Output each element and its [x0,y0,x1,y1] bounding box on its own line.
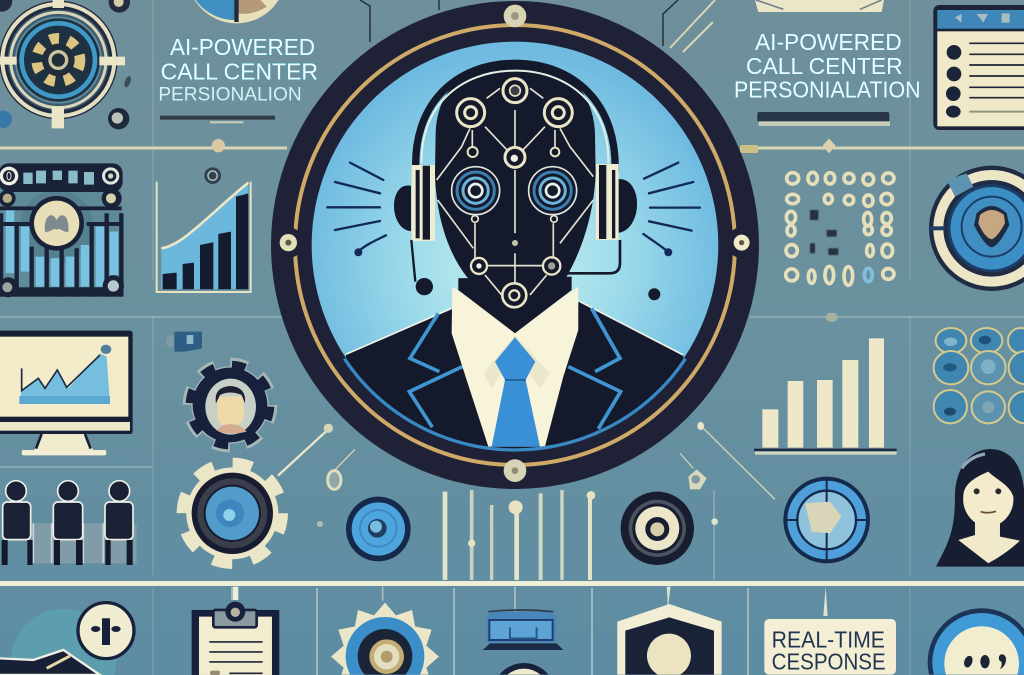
chart: cream bars [754,338,897,455]
vertical stub [823,587,828,616]
main portrait medallion [271,1,759,489]
connector lines [680,422,775,580]
icon: blue compass badge [783,477,870,563]
lower-left region [0,331,355,675]
icon: monitor with chart [0,331,133,455]
label: real-time response: CESPONSE [772,649,886,675]
icon: blue audio button [346,497,411,561]
knob right [826,313,838,322]
title underline right [757,112,890,126]
icon: form window [933,5,1024,130]
left eye [452,167,500,215]
title left: AI-POWERED [170,34,315,60]
lapels [409,308,621,429]
icon: equalizer panel [0,163,124,297]
title right: CALL CENTER [746,53,903,79]
small knobs [0,0,132,129]
knob [212,139,225,152]
top-right region [734,0,1024,291]
icon: team seated at table [2,481,137,565]
knob and left tab [740,138,836,153]
label: real-time response [764,619,896,675]
suit [346,302,684,448]
icon: dot matrix [786,172,894,285]
label: real-time response: REAL-TIME [772,627,885,653]
right eye [529,167,577,215]
panel stubs [380,587,385,601]
icon: gear with agent portrait [189,364,271,446]
icon: bottom ring [499,663,549,675]
icon: blue box device [483,610,563,650]
icon: small tag [166,332,202,352]
title left: CALL CENTER [161,58,318,84]
clipboard hanger [228,587,244,600]
icon: envelope [755,0,884,12]
icon: chat bubble [928,608,1024,675]
connector with dot [279,424,355,527]
bottom-centre region [331,490,722,675]
headset [395,63,636,295]
title right: PERSONIALATION [734,77,921,103]
title left [158,34,318,106]
tie [492,337,540,447]
icon: woman agent [936,449,1024,567]
robot agent suit and tie [346,287,683,467]
icon: blue rings grid [934,328,1024,423]
circuit nodes [457,79,572,307]
title left: PERSIONALION [158,85,302,106]
title underline left [160,116,275,123]
sound rays [327,163,700,300]
title right: AI-POWERED [755,29,902,55]
icon: cream gear with blue lens [185,466,280,561]
medallion frame [271,1,759,489]
icon: speaker target [621,492,694,565]
icon: shield edge [662,610,722,675]
icon: shield with person [617,587,722,675]
chart: rising bars with trend [157,167,251,292]
icon: top pie dial [187,0,286,23]
shirt collar [452,287,578,447]
robot head [435,60,596,333]
icon: profile dial [929,166,1024,291]
title right [734,29,921,103]
frame rivets [273,5,757,482]
lower-right region [662,313,1024,675]
icon: handshake with speech badge [0,603,134,675]
icon: clipboard [192,602,279,675]
icon: gear dial [0,0,125,128]
icon: sunburst gear [331,603,439,675]
circuit lines [437,88,593,295]
top connector strokes [360,0,715,52]
connector pillars [445,490,595,580]
top-left region [0,0,318,297]
